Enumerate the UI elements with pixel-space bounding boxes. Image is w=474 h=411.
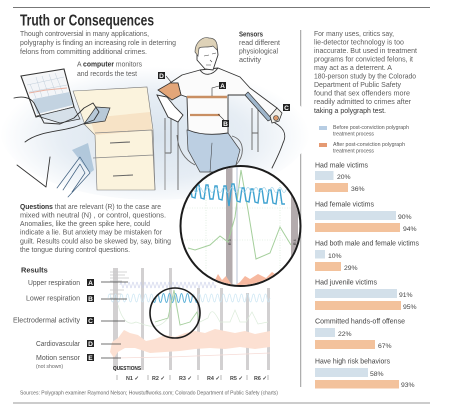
results legend: Electrodermal activity — [13, 316, 80, 324]
bar chart: committed hands-off offense: Committed hands-off offense — [315, 316, 405, 326]
right column text: Department of Public Safety — [314, 80, 401, 89]
magnified chart circle: R 3 — [228, 239, 232, 245]
questions axis: R2 ✓ — [152, 376, 165, 382]
illustration: polygraph test scene — [0, 38, 310, 200]
questions text block: Questions that are relevant (R) to the case are — [20, 202, 161, 211]
bar chart legend: treatment process — [333, 148, 374, 154]
bar chart: have high risk behaviors — [315, 356, 415, 389]
results legend: Lower respiration — [26, 294, 80, 302]
icon: examiner with hand on mouse pad — [14, 97, 110, 197]
bar chart: had juvenile victims: 95% — [403, 304, 417, 311]
bar chart: had both male and female victims: 29% — [344, 265, 358, 272]
bar chart: had male victims: 20% — [337, 174, 351, 181]
bar chart legend: After post-conviction polygraph — [333, 142, 405, 148]
magnified chart circle — [180, 165, 300, 287]
right column text: For many uses, critics say, — [314, 29, 394, 38]
intro text: Though controversial in many applications, — [20, 29, 149, 38]
magnified chart circle: R 4 — [293, 239, 297, 245]
right column text — [314, 29, 417, 115]
label D: D — [159, 73, 164, 80]
icon: man — [157, 38, 285, 172]
sensor D cuff — [158, 83, 181, 100]
bar chart legend: treatment process — [333, 132, 374, 138]
bar chart: committed hands-off offense: 22% — [338, 331, 352, 338]
computer caption: A computer monitors — [77, 60, 142, 68]
questions text block: Anomalies, like the green spike here, could — [20, 219, 150, 228]
bar chart: had both male and female victims: Had both male and female victims — [315, 238, 419, 248]
bar chart: had male victims — [315, 160, 368, 193]
bar chart: had female victims: Had female victims — [315, 200, 374, 208]
computer caption: and records the test — [77, 69, 137, 78]
questions text block: mixed with neutral (N) , or control, questions. — [20, 210, 166, 220]
results legend: (not shown) — [36, 364, 63, 370]
title: Truth or Consequences — [20, 12, 154, 30]
right column text: inaccurate. But used in treatment — [314, 46, 417, 55]
bar chart: had juvenile victims: Had juvenile victims — [315, 278, 377, 286]
questions axis: N1 ✓ — [126, 376, 139, 382]
label C — [283, 104, 290, 112]
sensors caption — [239, 30, 280, 64]
source line: Sources: Polygraph examiner Raymond Nelson; Howstuffworks.com; Colorado Department of Public Safety (charts) — [20, 390, 278, 396]
results legend: Results — [21, 266, 48, 274]
bar chart: had female victims — [315, 200, 417, 233]
key E: E — [88, 355, 93, 362]
polygraph results chart — [101, 268, 270, 382]
right column text: taking a polygraph test. — [314, 106, 386, 115]
small magnifier ring — [150, 288, 201, 338]
questions text block — [20, 202, 171, 254]
label lines — [101, 282, 128, 358]
bar chart: have high risk behaviors: 58% — [370, 371, 384, 378]
bar chart: have high risk behaviors: Have high risk behaviors — [315, 356, 390, 366]
right column text: may act as a deterrent. A — [314, 63, 392, 72]
bar chart: had both male and female victims: 10% — [328, 253, 342, 260]
icon: laptop — [21, 69, 80, 123]
bar chart: had male victims: 36% — [351, 186, 365, 193]
intro text: felons from committing additional crimes. — [20, 47, 147, 56]
intro text — [20, 29, 176, 56]
bar chart: had female victims: 90% — [398, 214, 412, 221]
right column text: readily admitted to crimes after — [314, 97, 412, 106]
questions axis — [113, 366, 268, 382]
right column text: lie-detector technology is too — [314, 38, 404, 46]
questions axis: R6 ✓ — [254, 376, 267, 382]
key C: C — [88, 318, 93, 325]
results legend: Motion sensor — [36, 353, 80, 362]
right column text: 180-person study by the Colorado — [314, 72, 416, 80]
results legend: Upper respiration — [28, 278, 80, 287]
sensors caption: read different — [239, 38, 280, 47]
questions axis: QUESTIONS — [113, 366, 141, 372]
right column text: programs for convicted felons, it — [314, 54, 413, 64]
questions axis: R4 ✓ — [207, 376, 220, 382]
key B: B — [88, 296, 93, 303]
intro text: polygraphy is finding an increasing role in deterring — [20, 38, 176, 47]
questions text block: the tongue during control questions. — [20, 245, 130, 254]
bar chart: had both male and female victims — [315, 238, 419, 272]
bar chart legend: Before post-conviction polygraph — [333, 125, 409, 131]
bar chart: committed hands-off offense: 67% — [378, 343, 392, 350]
computer caption — [77, 60, 142, 78]
icon: chair — [165, 108, 258, 190]
bar chart: had juvenile victims — [315, 278, 417, 311]
label B: B — [223, 121, 228, 128]
bar chart: had male victims: Had male victims — [315, 160, 368, 170]
questions text block: indicate a lie. But anxiety may be mistaken for — [20, 228, 162, 236]
sensors caption: activity — [239, 55, 261, 64]
label B — [222, 120, 229, 128]
bar chart: had female victims: 94% — [403, 226, 417, 233]
label D — [158, 72, 165, 80]
bar chart: have high risk behaviors: 93% — [401, 382, 415, 389]
label C: C — [284, 105, 289, 112]
sensor B tube — [190, 114, 220, 116]
questions axis: R3 ✓ — [179, 376, 192, 382]
sensors caption: physiological — [239, 46, 278, 56]
icon: desk — [73, 87, 155, 190]
questions axis: R5 ✓ — [230, 376, 243, 382]
sensors caption: Sensors — [239, 30, 263, 38]
label A — [219, 82, 226, 90]
right column text: found that sex offenders more — [314, 88, 410, 98]
bar chart legend — [319, 125, 409, 154]
sensor A tube — [187, 96, 227, 98]
questions text block: guilt. Results could also be skewed by, say, biting — [20, 236, 171, 246]
key A: A — [88, 280, 93, 287]
bar chart: committed hands-off offense — [315, 316, 405, 350]
results legend — [13, 266, 94, 370]
label A: A — [220, 83, 225, 90]
results legend: Cardiovascular — [36, 339, 80, 348]
bar chart: had juvenile victims: 91% — [399, 292, 413, 299]
key D: D — [88, 341, 93, 348]
